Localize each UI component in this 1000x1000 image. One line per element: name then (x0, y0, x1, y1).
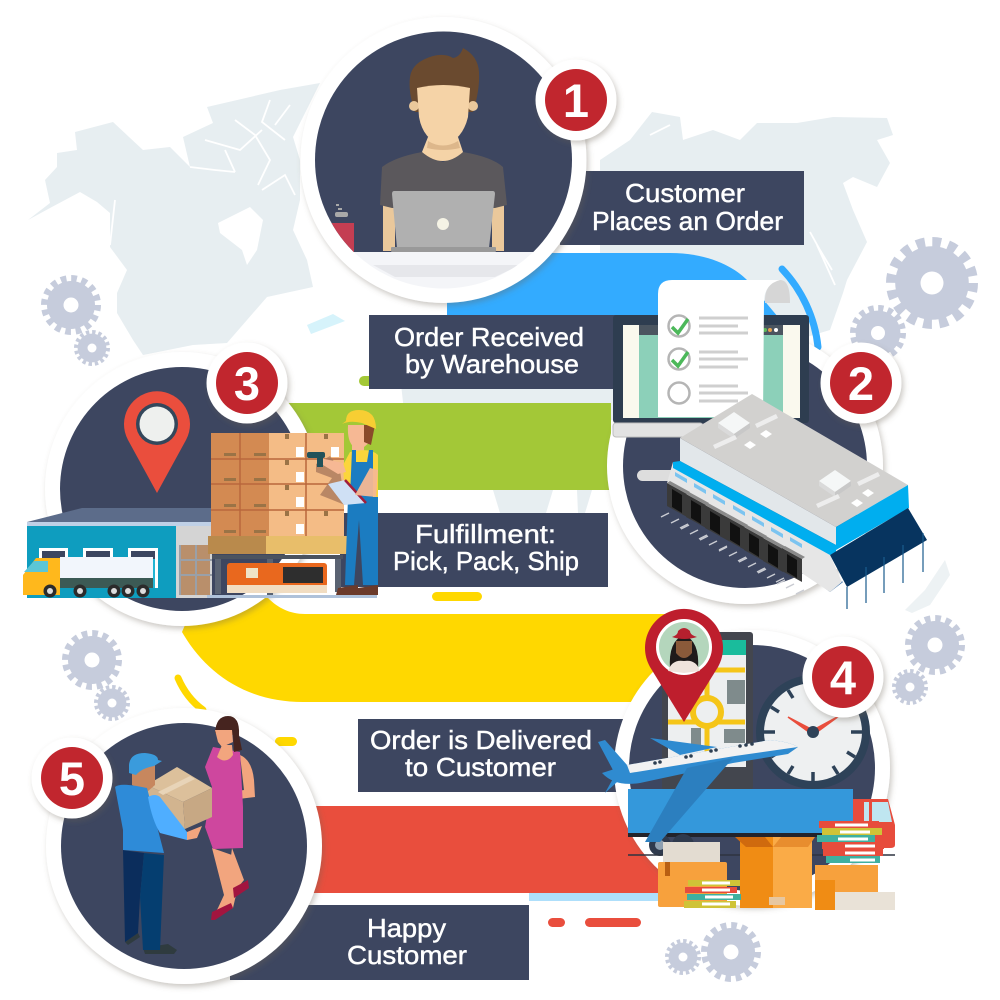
roof units (713, 412, 880, 508)
map: Africa (395, 330, 615, 513)
gear right small (894, 671, 926, 703)
number badge 5: 5 (59, 752, 85, 805)
map: Australasia (905, 560, 950, 613)
panel: step 5 happy customer (46, 708, 322, 984)
number badge 2: 2 (848, 357, 874, 410)
ring 2 (607, 328, 883, 604)
red map pin (645, 609, 723, 722)
warehouse building (637, 394, 927, 609)
person (380, 48, 507, 251)
label 2: Order Received (394, 322, 584, 352)
number badge 1: 1 (563, 74, 589, 127)
label 4 (358, 719, 628, 792)
dark disc 4 (629, 645, 875, 891)
cyan accent (307, 314, 345, 334)
label 4: to Customer (405, 752, 556, 782)
label 2 (369, 315, 619, 389)
clock (756, 675, 870, 789)
map: Eurasia (600, 112, 893, 345)
warehouse (27, 508, 215, 598)
blue ribbon (447, 253, 778, 317)
ring 3 (45, 352, 319, 626)
map: Hudson Bay and Arctic inlets (110, 100, 295, 265)
dark disc 1 (315, 32, 572, 252)
world map background (28, 83, 950, 613)
gear mid left large (65, 633, 119, 687)
label 1: Customer (625, 178, 745, 208)
panel: step 3 fulfillment (23, 342, 378, 626)
checklist document (658, 280, 790, 417)
laptop (391, 191, 496, 252)
panel: step 2 warehouse (607, 280, 927, 609)
yellow ribbon (182, 590, 700, 702)
cardboard box (147, 767, 212, 829)
blue truck (628, 789, 895, 856)
number badge 4: 4 (830, 651, 856, 704)
label 5: Customer (347, 940, 467, 970)
gear top right small (853, 308, 903, 358)
number badge 3 (206, 342, 288, 424)
dark disc 5 (61, 723, 307, 969)
label 5: Happy (367, 913, 446, 943)
gear right large (908, 618, 962, 672)
worker (307, 410, 378, 595)
number badge 2 (820, 342, 902, 424)
label 4: Order is Delivered (370, 725, 592, 755)
floor robot (207, 563, 377, 598)
number badge 5 (32, 738, 112, 818)
label 2: by Warehouse (405, 349, 579, 379)
label 5 (230, 905, 529, 980)
gear left large (44, 278, 98, 332)
number badge 3: 3 (234, 357, 260, 410)
light blue strip (529, 893, 664, 901)
label 3: Pick, Pack, Ship (393, 546, 579, 576)
airplane (598, 738, 798, 842)
phone with map (662, 632, 753, 790)
ring 1 (300, 17, 586, 303)
label 1: Places an Order (592, 206, 783, 236)
gears (44, 242, 973, 979)
gear mid left small (96, 687, 128, 719)
gear left small (76, 332, 108, 364)
label 3: Fulfillment: (415, 519, 556, 549)
desk (354, 252, 533, 288)
delivery man (115, 753, 202, 954)
blue thin arc (782, 269, 818, 347)
panel: step 1 customer (300, 17, 586, 303)
number badge 1 (536, 60, 616, 140)
red box and cup (332, 204, 354, 252)
dark disc 3 (60, 367, 304, 611)
location pin (124, 391, 190, 493)
laptop screen (613, 315, 809, 437)
panel: step 4 delivery (598, 609, 895, 910)
label 3 (340, 513, 608, 587)
yellow pill upper (432, 592, 482, 601)
dark disc 2 (623, 344, 867, 588)
ring 4 (614, 630, 890, 906)
label 1 (560, 171, 804, 245)
loading docks (661, 472, 805, 594)
ring 5 (46, 708, 322, 984)
map: Siberian inlets (650, 125, 835, 285)
yellow thin arc (178, 678, 203, 710)
woman (205, 716, 255, 920)
gear top right large (891, 242, 973, 324)
gear bottom small (667, 941, 699, 973)
gear bottom large (704, 925, 758, 979)
green ribbon (285, 403, 611, 490)
map: North America (28, 83, 320, 355)
yellow pill lower (275, 737, 297, 746)
red ribbon (300, 806, 670, 893)
red pills (548, 918, 641, 927)
number badge 4 (802, 636, 884, 718)
binders and boxes (658, 821, 895, 910)
pallet boxes (208, 433, 348, 596)
green pill (359, 376, 379, 386)
truck (23, 557, 153, 598)
